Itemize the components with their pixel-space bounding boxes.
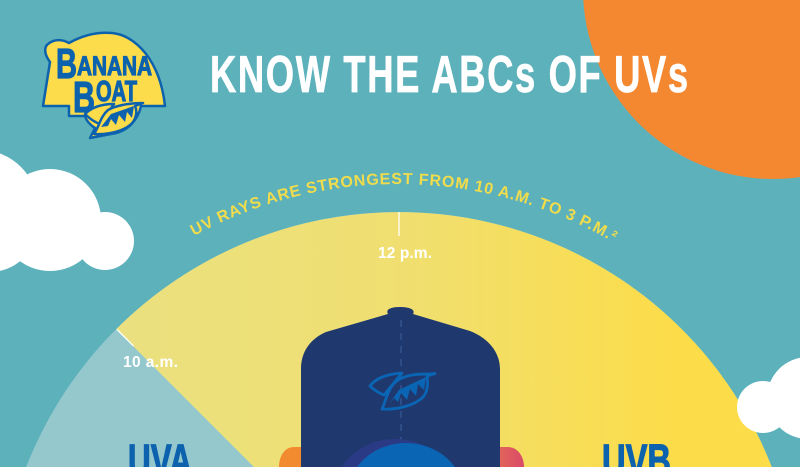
- cap: [301, 307, 500, 467]
- cap seam: [400, 320, 402, 440]
- cap opening: [335, 439, 455, 467]
- sun-hours arc: [0, 212, 799, 467]
- logo leaf: [85, 103, 143, 134]
- logo wordmark: Banana: OAT: [96, 76, 137, 108]
- logo wordmark: Banana: B: [73, 73, 95, 122]
- sun: [583, 0, 800, 179]
- UVB sector: [116, 212, 799, 467]
- cap leaf icon: [370, 373, 435, 409]
- logo: Banana Boat: [43, 33, 165, 138]
- person with cap: [279, 307, 524, 467]
- UVA sector: [0, 212, 799, 467]
- tick: 12 p.m.: [398, 212, 400, 236]
- logo wordmark: Banana: [56, 40, 152, 122]
- curved caption: UV RAYS ARE STRONGEST FROM 10 A.M. TO 3 P.M.²: [190, 172, 618, 238]
- ear: left: [279, 447, 301, 467]
- ear: right: [500, 447, 524, 467]
- head: [348, 443, 464, 467]
- title: KNOW THE ABCs OF UVs: [210, 44, 690, 104]
- logo wordmark: Banana: B: [56, 40, 77, 87]
- logo badge: [43, 33, 165, 138]
- label: 12 p.m.: 12 p.m.: [378, 245, 432, 262]
- logo wordmark: Banana: ANANA: [77, 51, 152, 81]
- cloud: left: [0, 150, 134, 272]
- tick: 10 a.m.: [117, 330, 134, 346]
- label: 10 a.m.: 10 a.m.: [123, 354, 178, 371]
- cloud: right: [737, 357, 800, 439]
